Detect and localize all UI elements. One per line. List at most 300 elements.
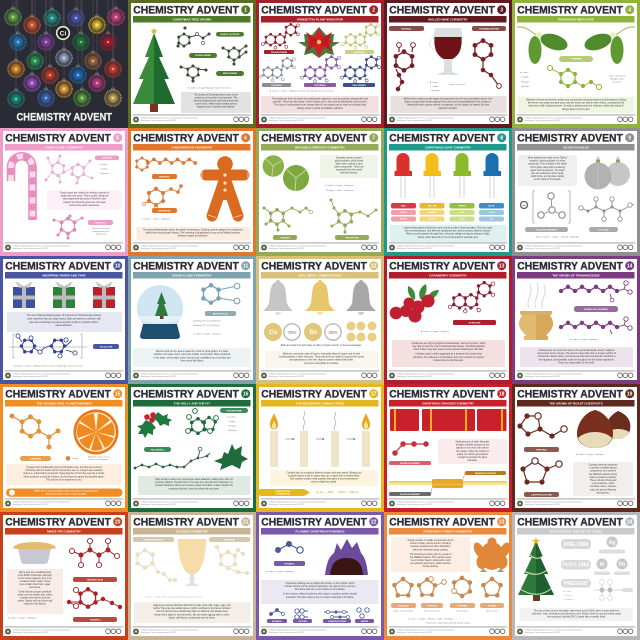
label: bornyl acetate: BORNYL ACETATE bbox=[221, 33, 240, 36]
subheading band: CANDY CANE CHEMISTRY bbox=[45, 145, 83, 149]
legend bbox=[430, 82, 465, 92]
label: eugenol: EUGENOL bbox=[90, 619, 101, 621]
note arrow: PARAFFIN WAX bbox=[275, 490, 291, 493]
molecule: oxygen bbox=[295, 609, 308, 619]
molecule: menthol bbox=[54, 216, 82, 238]
text box bbox=[261, 580, 378, 604]
label: glucose: GLUCOSE bbox=[598, 229, 609, 231]
text box: compound hederin, found to irritate skin and eyes. bbox=[169, 487, 220, 490]
subheading band: EGGNOG CHEMISTRY bbox=[176, 529, 208, 533]
text box: Mince pies are a traditional part bbox=[19, 571, 51, 574]
text box: presence of a number of compounds. The bbox=[195, 96, 238, 100]
footer bbox=[517, 242, 635, 250]
text box: enough to detonate the silver bbox=[458, 456, 488, 459]
label: limonene: LIMONENE bbox=[30, 458, 42, 460]
text box: Trick candles contain metal powders that ignite at low temperatures, bbox=[289, 478, 359, 480]
pill labels: THIAZOLE bbox=[398, 604, 409, 607]
text box: from polyvinyl chloride (PVC) coated with a metallic finish. bbox=[547, 616, 606, 618]
panel: 24 chemical history of tinsel bbox=[512, 512, 640, 640]
text box: Mistletoe's leaves and berries contain toxic compounds including tyramine and phoratoxins. Eating bbox=[526, 98, 627, 102]
text box: Silver baubles are made by the Tollens' bbox=[528, 156, 568, 160]
text box: Cranberry juice is often suggested as a treatment for urinary tract bbox=[415, 353, 482, 356]
legend: ● Carbon bbox=[99, 164, 107, 166]
legend: ○ Nitrogen bbox=[227, 424, 236, 428]
text box: These include furfural and bbox=[590, 479, 617, 482]
panel: 16 holly and ivy bbox=[128, 384, 256, 512]
text box: the berries can cause stomach upset, and the toxins can lead to other effects, including blurred bbox=[528, 102, 625, 105]
day number: 18 bbox=[499, 392, 505, 398]
label: ethanol: ETHANOL bbox=[284, 562, 295, 565]
label: carbon dioxide: CARBON DIOXIDE bbox=[328, 620, 347, 623]
label: tartaric acid: TARTARIC ACID bbox=[87, 578, 103, 581]
label: butyrolactone: γ-BUTYROLACTONE bbox=[531, 493, 552, 496]
footer: Shared under a Creative Commons licence: BY-NC-ND bbox=[140, 631, 176, 634]
panel: cover with baubles bbox=[0, 0, 128, 128]
icon: cracker bbox=[390, 409, 506, 431]
text box: The browning on turkey skin is a result of bbox=[410, 553, 452, 556]
text box: The use of tinsel as tree decoration dates back to the 1600s, when it was made from bbox=[534, 610, 619, 612]
text box: Cooking chestnuts produces bbox=[589, 464, 618, 466]
icon: baubles bbox=[584, 157, 630, 190]
molecule: furan bbox=[483, 579, 501, 595]
text box: based adhesive. bbox=[56, 325, 73, 327]
text box: ions are reduced to silver metal, bbox=[531, 172, 564, 175]
day number: 14 bbox=[627, 264, 633, 270]
text box: which forms a mirror-like coating bbox=[531, 175, 565, 178]
tin circle: Sn bbox=[309, 330, 317, 336]
label: alpha-pinene: ALPHA-PINENE bbox=[195, 54, 211, 57]
text box: the Maillard reaction during bbox=[589, 473, 618, 476]
footer bbox=[261, 114, 379, 122]
panel: 8 christmas light chemistry bbox=[384, 128, 512, 256]
text box: eugenol to the flavour. bbox=[24, 602, 47, 606]
footer: Shared under a Creative Commons licence: BY-NC-ND bbox=[396, 503, 432, 506]
text box bbox=[520, 608, 633, 621]
heading: CHEMISTRY ADVENT bbox=[261, 260, 367, 272]
day number: 24 bbox=[627, 520, 633, 526]
footer: Shared under a Creative Commons licence: BY-NC-ND bbox=[140, 247, 176, 250]
text box: found in them may also prevent some bacteria attaching to cell walls. bbox=[413, 348, 484, 351]
text box: γ-butyrolactone, which bbox=[592, 482, 615, 485]
panel: 6 gingerbread chemistry bbox=[128, 128, 256, 256]
panel: 23 christmas turkey chemistry bbox=[384, 512, 512, 640]
day number: 12 bbox=[371, 264, 377, 270]
text box bbox=[320, 155, 378, 178]
data rows: Solubility (20°C): 0.29 g/100 ml bbox=[193, 320, 221, 322]
footer: © Andy Brunning/Compound Interest 2017 - www.compoundchem.com | @compoundchem bbox=[524, 244, 583, 248]
text box: as pyrazines and furans, which develop bbox=[410, 562, 451, 565]
footer: Shared under a Creative Commons licence: BY-NC-ND bbox=[524, 247, 560, 250]
text box bbox=[390, 225, 506, 242]
icon: mince pie bbox=[13, 542, 56, 564]
day number: 9 bbox=[628, 136, 631, 142]
text box bbox=[518, 97, 634, 113]
icon: candy cane bbox=[11, 156, 32, 220]
text box: fulminate. bbox=[468, 459, 478, 462]
text box: alcohol it contains. bbox=[439, 107, 458, 110]
text box: and spices. bbox=[29, 587, 41, 589]
legend: ● Carbon bbox=[430, 82, 438, 84]
text box: In the reaction, ethanol combines with oxygen to produce carbon dioxide bbox=[283, 593, 358, 596]
text box: Candy canes are created by melting a mixture of bbox=[60, 192, 110, 194]
molecule: anthocyanin bbox=[261, 24, 299, 49]
legend: ● Carbon ○ Oxygen Hydrogen atoms not shown bbox=[188, 86, 230, 90]
label: gingerol: GINGEROL bbox=[159, 176, 171, 178]
subheading band: BRUSSELS SPROUTS CHEMISTRY bbox=[295, 145, 345, 149]
label: progoitrin: PROGOITRIN bbox=[345, 237, 359, 239]
heading: CHEMISTRY ADVENT bbox=[261, 388, 367, 400]
pill labels: PYRIDINE bbox=[458, 605, 468, 607]
label: falcarinol: FALCARINOL bbox=[151, 448, 165, 451]
panel: 14 aroma of frankincense bbox=[512, 256, 640, 384]
label: AURONES bbox=[354, 51, 365, 54]
pill labels: FURAN bbox=[488, 604, 496, 607]
molecule: tartaric acid bbox=[69, 538, 120, 568]
footer: © Andy Brunning/Compound Interest 2017 - www.compoundchem.com | @compoundchem bbox=[268, 116, 327, 120]
text box: from semiconductors, and different compounds are used to produce different colours. bbox=[405, 230, 492, 233]
molecule: cellulose bbox=[9, 334, 87, 358]
text box: blue flame that sits on the surface of the pudding. bbox=[295, 588, 345, 591]
text box bbox=[392, 340, 505, 367]
text box: Christmas puddings are set alight with brandy or other spirits, which bbox=[286, 582, 355, 585]
molecule: water bbox=[357, 608, 369, 618]
label: beta-pinene: BETA-PINENE bbox=[223, 72, 238, 75]
footer: © Andy Brunning/Compound Interest 2017 - www.compoundchem.com | @compoundchem bbox=[140, 116, 199, 120]
text box bbox=[573, 462, 633, 496]
icon: candles bbox=[270, 431, 370, 467]
data rows: Solubility (95°C): 6.8 g/100 ml bbox=[193, 324, 220, 327]
footer: Shared under a Creative Commons licence: BY-NC-ND bbox=[12, 503, 48, 506]
footer: Shared under a Creative Commons licence: BY-NC-ND bbox=[268, 375, 304, 378]
molecule: eugenol bbox=[396, 43, 415, 89]
molecule: myricetin bbox=[448, 282, 495, 313]
text box: of the British Christmas. Although, bbox=[18, 574, 53, 577]
warning bar: NOTE: Do not attempt without adult supervision and appropriate bbox=[34, 490, 99, 493]
molecule: sinigrin bbox=[264, 208, 313, 230]
icon: gold bell bbox=[305, 280, 335, 315]
text box: to determine its effectiveness. bbox=[433, 359, 464, 362]
icon: flames bbox=[270, 413, 370, 430]
legend: ○ Chlorine bbox=[563, 594, 573, 597]
text box: Eggnog is a spiced alcoholic drink that is made using milk, sugar, eggs, and bbox=[154, 604, 231, 607]
text box: which has a less pungent flavour. The browning of gingerbread is due to the Maillard reaction bbox=[146, 232, 241, 235]
heading: CHEMISTRY ADVENT bbox=[133, 4, 239, 16]
heading: CHEMISTRY ADVENT bbox=[261, 516, 367, 528]
pill notes: Roast, savoury aroma bbox=[394, 609, 414, 612]
note arrow: COMBUSTION bbox=[276, 494, 291, 496]
footer bbox=[389, 242, 507, 250]
panel: 7 brussels sprouts chemistry bbox=[256, 128, 384, 256]
legend: ● Carbon ○ Oxygen Some carbon and hydrogen atoms not shown bbox=[144, 596, 202, 598]
logo bauble: Ci bbox=[60, 30, 66, 37]
day number: 17 bbox=[371, 392, 377, 398]
legend: ● Carbon ○ Oxygen · Hydrogen Some carbon and hydrogen atoms not shown bbox=[14, 365, 83, 368]
legend: hydrogen atoms bbox=[610, 78, 624, 80]
text box: as the name suggests, they once bbox=[18, 577, 53, 580]
molecule: pyrrole bbox=[419, 577, 446, 595]
text box: in hot water, as the water cools, benzoic acid crystallises out of solution and bbox=[154, 356, 231, 359]
diagram: friction strip bbox=[389, 473, 507, 494]
text box: The spicy-tasting gingerol gives the ginger its pungency. Cooking converts gingerol into zingerone, bbox=[143, 228, 243, 232]
text box: pets and children. Theobromine is the main one, also found in chocolate. Ivy bbox=[155, 481, 234, 484]
label: tyramine: TYRAMINE bbox=[571, 58, 582, 61]
label: eugenol: EUGENOL bbox=[401, 28, 412, 30]
molecule: alpha-pinene bbox=[223, 46, 246, 64]
text box bbox=[391, 537, 470, 572]
text box: sulfur compounds. These are bbox=[334, 166, 365, 168]
legend: ● Carbon bbox=[563, 591, 571, 593]
legend: · Hydrogen bbox=[227, 430, 237, 432]
text box: Brussels sprouts contain bbox=[336, 156, 362, 160]
heading: CHEMISTRY ADVENT bbox=[389, 132, 495, 144]
molecule: silver fulminate bbox=[395, 444, 426, 453]
text box: contains falcarinol, which can provoke contact dermatitis. It also contains the bbox=[155, 484, 234, 487]
text box: Oranges don't traditionally grow on Christmas trees, and they are found at bbox=[26, 466, 102, 469]
icon: yellow LED bbox=[424, 153, 441, 198]
text box: between sugars and proteins. bbox=[178, 235, 208, 238]
text box: and so relight the candle. bbox=[311, 480, 337, 484]
legend: ● Carbon ○ Oxygen · Hydrogen bbox=[576, 453, 604, 456]
text box bbox=[390, 96, 506, 113]
icon: poinsettia bbox=[298, 27, 340, 58]
text box: sugar and corn syrup. This is cooled, flavoured bbox=[61, 195, 109, 198]
text box: The colour of anthocyanins can change with pH, so extracts can be used as indicators that bbox=[274, 104, 366, 107]
icon: christmas tree bbox=[518, 537, 554, 601]
label: tollens reagent: TOLLENS' REAGENT bbox=[536, 228, 558, 231]
legend: ● Carbon ○ Oxygen · Hydrogen bbox=[8, 617, 36, 620]
legend: ● Carbon ○ Oxygen · Hydrogen bbox=[266, 570, 294, 573]
labels: yellow column bbox=[420, 203, 444, 222]
labels: blue column bbox=[479, 203, 504, 222]
text box: nutty and almond flavours bbox=[590, 488, 617, 491]
text box bbox=[438, 439, 507, 464]
footer: © Andy Brunning/Compound Interest 2017 - www.compoundchem.com | @compoundchem bbox=[268, 500, 327, 504]
day number: 20 bbox=[115, 520, 121, 526]
heading: CHEMISTRY ADVENT bbox=[5, 388, 111, 400]
label: zingerone: ZINGERONE bbox=[158, 210, 171, 212]
legend: · Hydrogen bbox=[99, 173, 109, 175]
copper circle: Cu bbox=[269, 330, 277, 336]
pill notes: Sweet aroma bbox=[486, 609, 499, 612]
text box: soluble in hot water, but is much less soluble in cool water. When dissolved bbox=[154, 353, 231, 356]
labels: red column: RED bbox=[401, 206, 406, 208]
day number: 19 bbox=[627, 392, 633, 398]
label: boswellic acid: ELEMIC ACID ISOMERS bbox=[584, 308, 608, 311]
legend: ● Carbon ○ Oxygen · Hydrogen bbox=[193, 333, 221, 336]
heading: CHEMISTRY ADVENT bbox=[389, 388, 495, 400]
footer bbox=[389, 626, 507, 634]
day number: 16 bbox=[243, 392, 249, 398]
text box: the cracker. When the cracker is bbox=[456, 450, 490, 453]
label: myricetin: MYRICETIN bbox=[469, 322, 481, 324]
molecule: carbon dioxide bbox=[324, 610, 350, 619]
text box bbox=[270, 470, 378, 486]
text box: glucosinolates, which break bbox=[335, 160, 364, 162]
molecule: gingerol bbox=[137, 158, 195, 170]
icon: green gift bbox=[53, 283, 75, 308]
molecule: falcarinol bbox=[135, 447, 210, 468]
molecule: ethanol small bbox=[271, 610, 285, 616]
legend: ○ Oxygen bbox=[227, 420, 236, 423]
label: PETUNIDIN bbox=[314, 85, 326, 87]
text box: with peppermint and pulled. Menthol in the bbox=[63, 198, 107, 201]
text box: pies contain dried fruits, sugar bbox=[20, 583, 51, 586]
panel: 15 orange peel flamethrower bbox=[0, 384, 128, 512]
footer: Shared under a Creative Commons licence: BY-NC-ND bbox=[524, 119, 560, 122]
molecule: progoitrin bbox=[331, 200, 376, 232]
panel: 20 mince pie chemistry bbox=[0, 512, 128, 640]
subheading band: SILVER BAUBLES bbox=[563, 145, 589, 149]
footer bbox=[261, 242, 379, 250]
footer: © Andy Brunning/Compound Interest 2017 - www.compoundchem.com | @compoundchem bbox=[140, 500, 199, 504]
subheading band: THE AROMA OF FRANKINCENSE bbox=[552, 273, 600, 277]
icon: silver bell bbox=[263, 280, 293, 315]
molecule: gray variant bbox=[259, 58, 295, 82]
subheading band: POINSETTIA PLANT INDICATOR bbox=[297, 17, 344, 21]
molecule: silver complex: Ag bbox=[523, 204, 526, 207]
heading: CHEMISTRY ADVENT bbox=[389, 4, 495, 16]
legend: ○ Oxygen bbox=[99, 168, 108, 170]
molecule: butyrolactone bbox=[523, 458, 562, 482]
footer: Shared under a Creative Commons licence: BY-NC-ND bbox=[524, 375, 560, 378]
heading: CHEMISTRY ADVENT bbox=[517, 516, 623, 528]
footer: © Andy Brunning/Compound Interest 2017 - www.compoundchem.com | @compoundchem bbox=[396, 244, 455, 248]
legend: ● Carbon ○ Oxygen · Hydrogen bbox=[142, 218, 170, 220]
legend: ● Carbon ○ Oxygen · Hydrogen bbox=[325, 185, 353, 187]
text box bbox=[136, 227, 250, 240]
labels: yellow column: YELLOW bbox=[428, 206, 436, 208]
text box: and aromas. bbox=[597, 491, 610, 494]
text box bbox=[518, 155, 577, 186]
day number: 21 bbox=[243, 520, 249, 526]
text box: A large number of volatile compounds can be bbox=[408, 539, 454, 542]
footer: © Andy Brunning/Compound Interest 2017 - www.compoundchem.com | @compoundchem bbox=[140, 628, 199, 632]
text box: and bitter flavour. bbox=[340, 172, 358, 174]
heading: CHEMISTRY ADVENT bbox=[517, 4, 623, 16]
icon: holly bbox=[137, 412, 172, 438]
labels: blue column: InGaN bbox=[488, 212, 495, 214]
icon: mistletoe bbox=[517, 27, 635, 64]
panel: 13 cranberry chemistry bbox=[384, 256, 512, 384]
footer: Shared under a Creative Commons licence: BY-NC-ND bbox=[396, 631, 432, 634]
subheading band: MINCE PIE CHEMISTRY bbox=[47, 529, 81, 533]
label: menthol: MENTHOL bbox=[95, 222, 106, 224]
label: silver fulminate strip: SILVER FULMINATE bbox=[400, 493, 421, 496]
label: sabinene: SABINENE bbox=[224, 538, 235, 541]
equation: C₂₅H₅₂ + 38O₂ → 25CO₂ + 26H₂O bbox=[316, 490, 359, 494]
subheading band: MULLED WINE CHEMISTRY bbox=[428, 17, 468, 21]
panel: 4 poisonous mistletoe bbox=[512, 0, 640, 128]
subheading band: THE HOLLY AND THE IVY bbox=[174, 401, 210, 405]
footer: Shared under a Creative Commons licence: BY-NC-ND bbox=[140, 375, 176, 378]
molecule: beta-pinene bbox=[181, 66, 206, 81]
footer bbox=[133, 114, 251, 122]
panel: 22 flaming christmas puddings bbox=[256, 512, 384, 640]
label: PELARGONIDIN bbox=[271, 51, 287, 54]
heading: CHEMISTRY ADVENT bbox=[133, 260, 239, 272]
labels: green column bbox=[450, 203, 474, 222]
text box: from the alcohol has a disinfecting effect on bacteria, and studies have bbox=[156, 610, 229, 613]
heading: CHEMISTRY ADVENT bbox=[133, 132, 239, 144]
day number: 8 bbox=[500, 136, 503, 142]
text box: acids, such as tartaric acid, which bbox=[18, 594, 53, 596]
legend: ○ Oxygen bbox=[430, 86, 439, 88]
icon: tree bbox=[133, 28, 175, 112]
text box: compounds. Elemic acids, monoterpenes and other compounds contribute to bbox=[537, 355, 616, 358]
footer: © Andy Brunning/Compound Interest 2017 - www.compoundchem.com | @compoundchem bbox=[524, 500, 583, 504]
timeline pill: pre 1960: PRE-1960 bbox=[564, 542, 588, 548]
text box: When a current passes through them, electrons release energy as photons of light, bbox=[406, 233, 490, 236]
text box: tape also containing a pressure-sensitive acrylic or synthetic rubber- bbox=[29, 321, 99, 324]
label: furfural: FURFURAL bbox=[536, 448, 548, 451]
label: DELPHINIDIN bbox=[352, 85, 366, 87]
footer: Shared under a Creative Commons licence: BY-NC-ND bbox=[268, 247, 304, 250]
icon: smoke bbox=[303, 411, 336, 430]
text box: Dried fruits and sugar contribute bbox=[19, 590, 52, 594]
heading: CHEMISTRY ADVENT bbox=[389, 516, 495, 528]
panel: 11 snow globe chemistry bbox=[128, 256, 256, 384]
text box bbox=[138, 476, 250, 495]
heading: CHEMISTRY ADVENT bbox=[5, 516, 111, 528]
day number: 4 bbox=[628, 8, 631, 14]
text box: contained meat, today's mince bbox=[20, 580, 51, 583]
icon: sprouts bbox=[263, 155, 309, 191]
panel: 2 poinsettia plant indicator bbox=[256, 0, 384, 128]
pill notes: Roast meat aroma bbox=[424, 609, 441, 612]
text box: shown that if aged for several weeks, this can make eggnog safer to drink. bbox=[154, 613, 230, 616]
footer bbox=[261, 626, 379, 634]
panel: 17 relighting candle trick bbox=[256, 384, 384, 512]
text box: hexanal, pentanal and other aldehydes, bbox=[410, 545, 451, 548]
footer bbox=[133, 498, 251, 506]
text box: combine with tannins and fruit bbox=[20, 596, 51, 600]
molecule: glucose bbox=[579, 197, 634, 221]
footer: © Andy Brunning/Compound Interest 2017 - www.compoundchem.com | @compoundchem bbox=[12, 628, 71, 632]
note: Bells are made from bell metal, an alloy of copper and tin, in these percentages bbox=[281, 344, 362, 347]
text box: infections, but evidence is inconclusive and more research is required bbox=[413, 356, 485, 359]
panel: 9 silver baubles bbox=[512, 128, 640, 256]
text box bbox=[261, 96, 378, 113]
heading: CHEMISTRY ADVENT bbox=[517, 388, 623, 400]
text box: Light-emitting diodes (LEDs) are used in most modern Christmas lights. They are made bbox=[404, 226, 493, 230]
label: sinigrin: SINIGRIN bbox=[280, 237, 290, 239]
molecule: benzoic acid bbox=[203, 283, 240, 304]
footer: © Andy Brunning/Compound Interest 2017 - www.compoundchem.com | @compoundchem bbox=[268, 244, 327, 248]
legend bbox=[520, 72, 625, 88]
legend: Some carbon and bbox=[449, 84, 465, 86]
footer: © Andy Brunning/Compound Interest 2017 - www.compoundchem.com | @compoundchem bbox=[396, 628, 455, 632]
molecule: cinnamaldehyde bbox=[475, 41, 501, 88]
day number: 2 bbox=[372, 8, 375, 14]
text box: and appearance of the bell. High tin content makes bells brittle, bbox=[289, 359, 354, 362]
legend: Carbon bbox=[72, 458, 79, 460]
footer bbox=[5, 242, 123, 250]
text box: fragrant note of camphor and balsam. bbox=[197, 106, 236, 108]
label: cinnamaldehyde: CINNAMALDEHYDE bbox=[479, 27, 499, 30]
footer bbox=[5, 498, 123, 506]
footer: Shared under a Creative Commons licence: BY-NC-ND bbox=[268, 503, 304, 506]
panel: 18 christmas cracker chemistry bbox=[384, 384, 512, 512]
text box: terpenes alpha-pinene and beta-pinene add bbox=[194, 100, 239, 102]
icon: turkey bbox=[472, 538, 512, 572]
footer: © Andy Brunning/Compound Interest 2017 - www.compoundchem.com | @compoundchem bbox=[268, 372, 327, 376]
footer: Shared under a Creative Commons licence: BY-NC-ND bbox=[12, 631, 48, 634]
text box: flavour compounds include eugenol from cloves and cinnamaldehyde from cinnamon. bbox=[405, 101, 492, 104]
timeline pill: present: PRESENT bbox=[564, 581, 589, 587]
note: Menthol is the main bbox=[92, 227, 110, 230]
molecule: limonene bbox=[12, 416, 58, 447]
baubles bbox=[5, 7, 124, 107]
